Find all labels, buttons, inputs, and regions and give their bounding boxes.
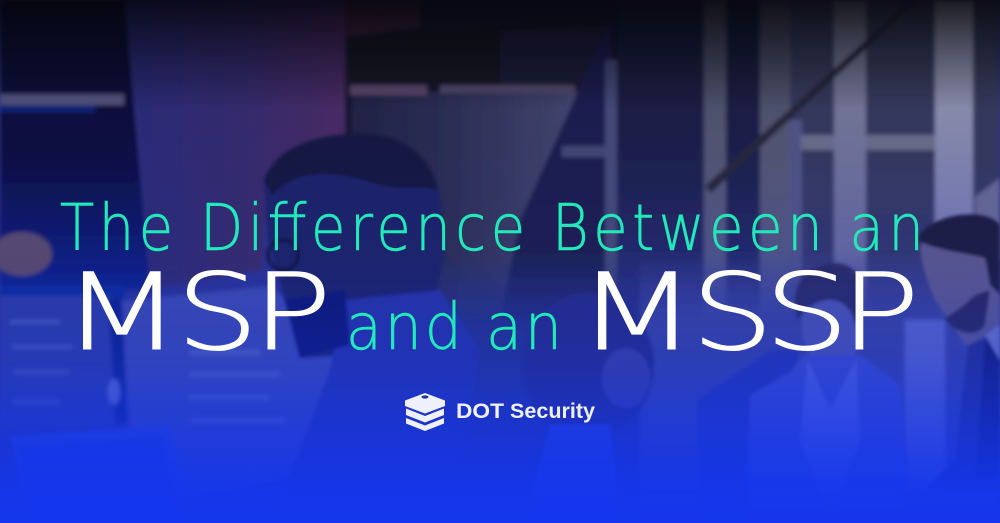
logo wordmark: Security (510, 400, 595, 423)
bearded man at right (920, 216, 1000, 345)
connector text: and an: and an (346, 290, 562, 365)
icon: stacked layers (405, 393, 445, 431)
heading: MSSP: S (691, 252, 774, 375)
curly-haired woman (522, 293, 654, 437)
heading: MSP (61, 251, 332, 375)
logo wordmark: DOT (456, 400, 504, 423)
smiling woman in blazer (802, 280, 862, 370)
man with glasses in foreground (264, 134, 445, 358)
heading: MSSP: P (840, 252, 920, 375)
top shadow (0, 0, 1000, 110)
heading: MSP: M (61, 251, 183, 374)
left dark wall (0, 0, 150, 290)
logo: DOT Security (405, 393, 595, 431)
heading: MSSP: S (764, 251, 849, 374)
title line: The Difference Between an: The Difference Between an (60, 192, 924, 266)
lower office background (640, 250, 1000, 523)
left monitors (0, 286, 125, 298)
heading: MSP: S (176, 252, 259, 375)
upper ceiling and stair wall (345, 0, 625, 320)
heading: MSSP: M (576, 251, 698, 374)
heading: MSSP (576, 251, 920, 375)
dark recess and windows (618, 0, 708, 340)
centre wall pillar (125, 0, 356, 290)
heading: MSP: P (252, 252, 332, 375)
